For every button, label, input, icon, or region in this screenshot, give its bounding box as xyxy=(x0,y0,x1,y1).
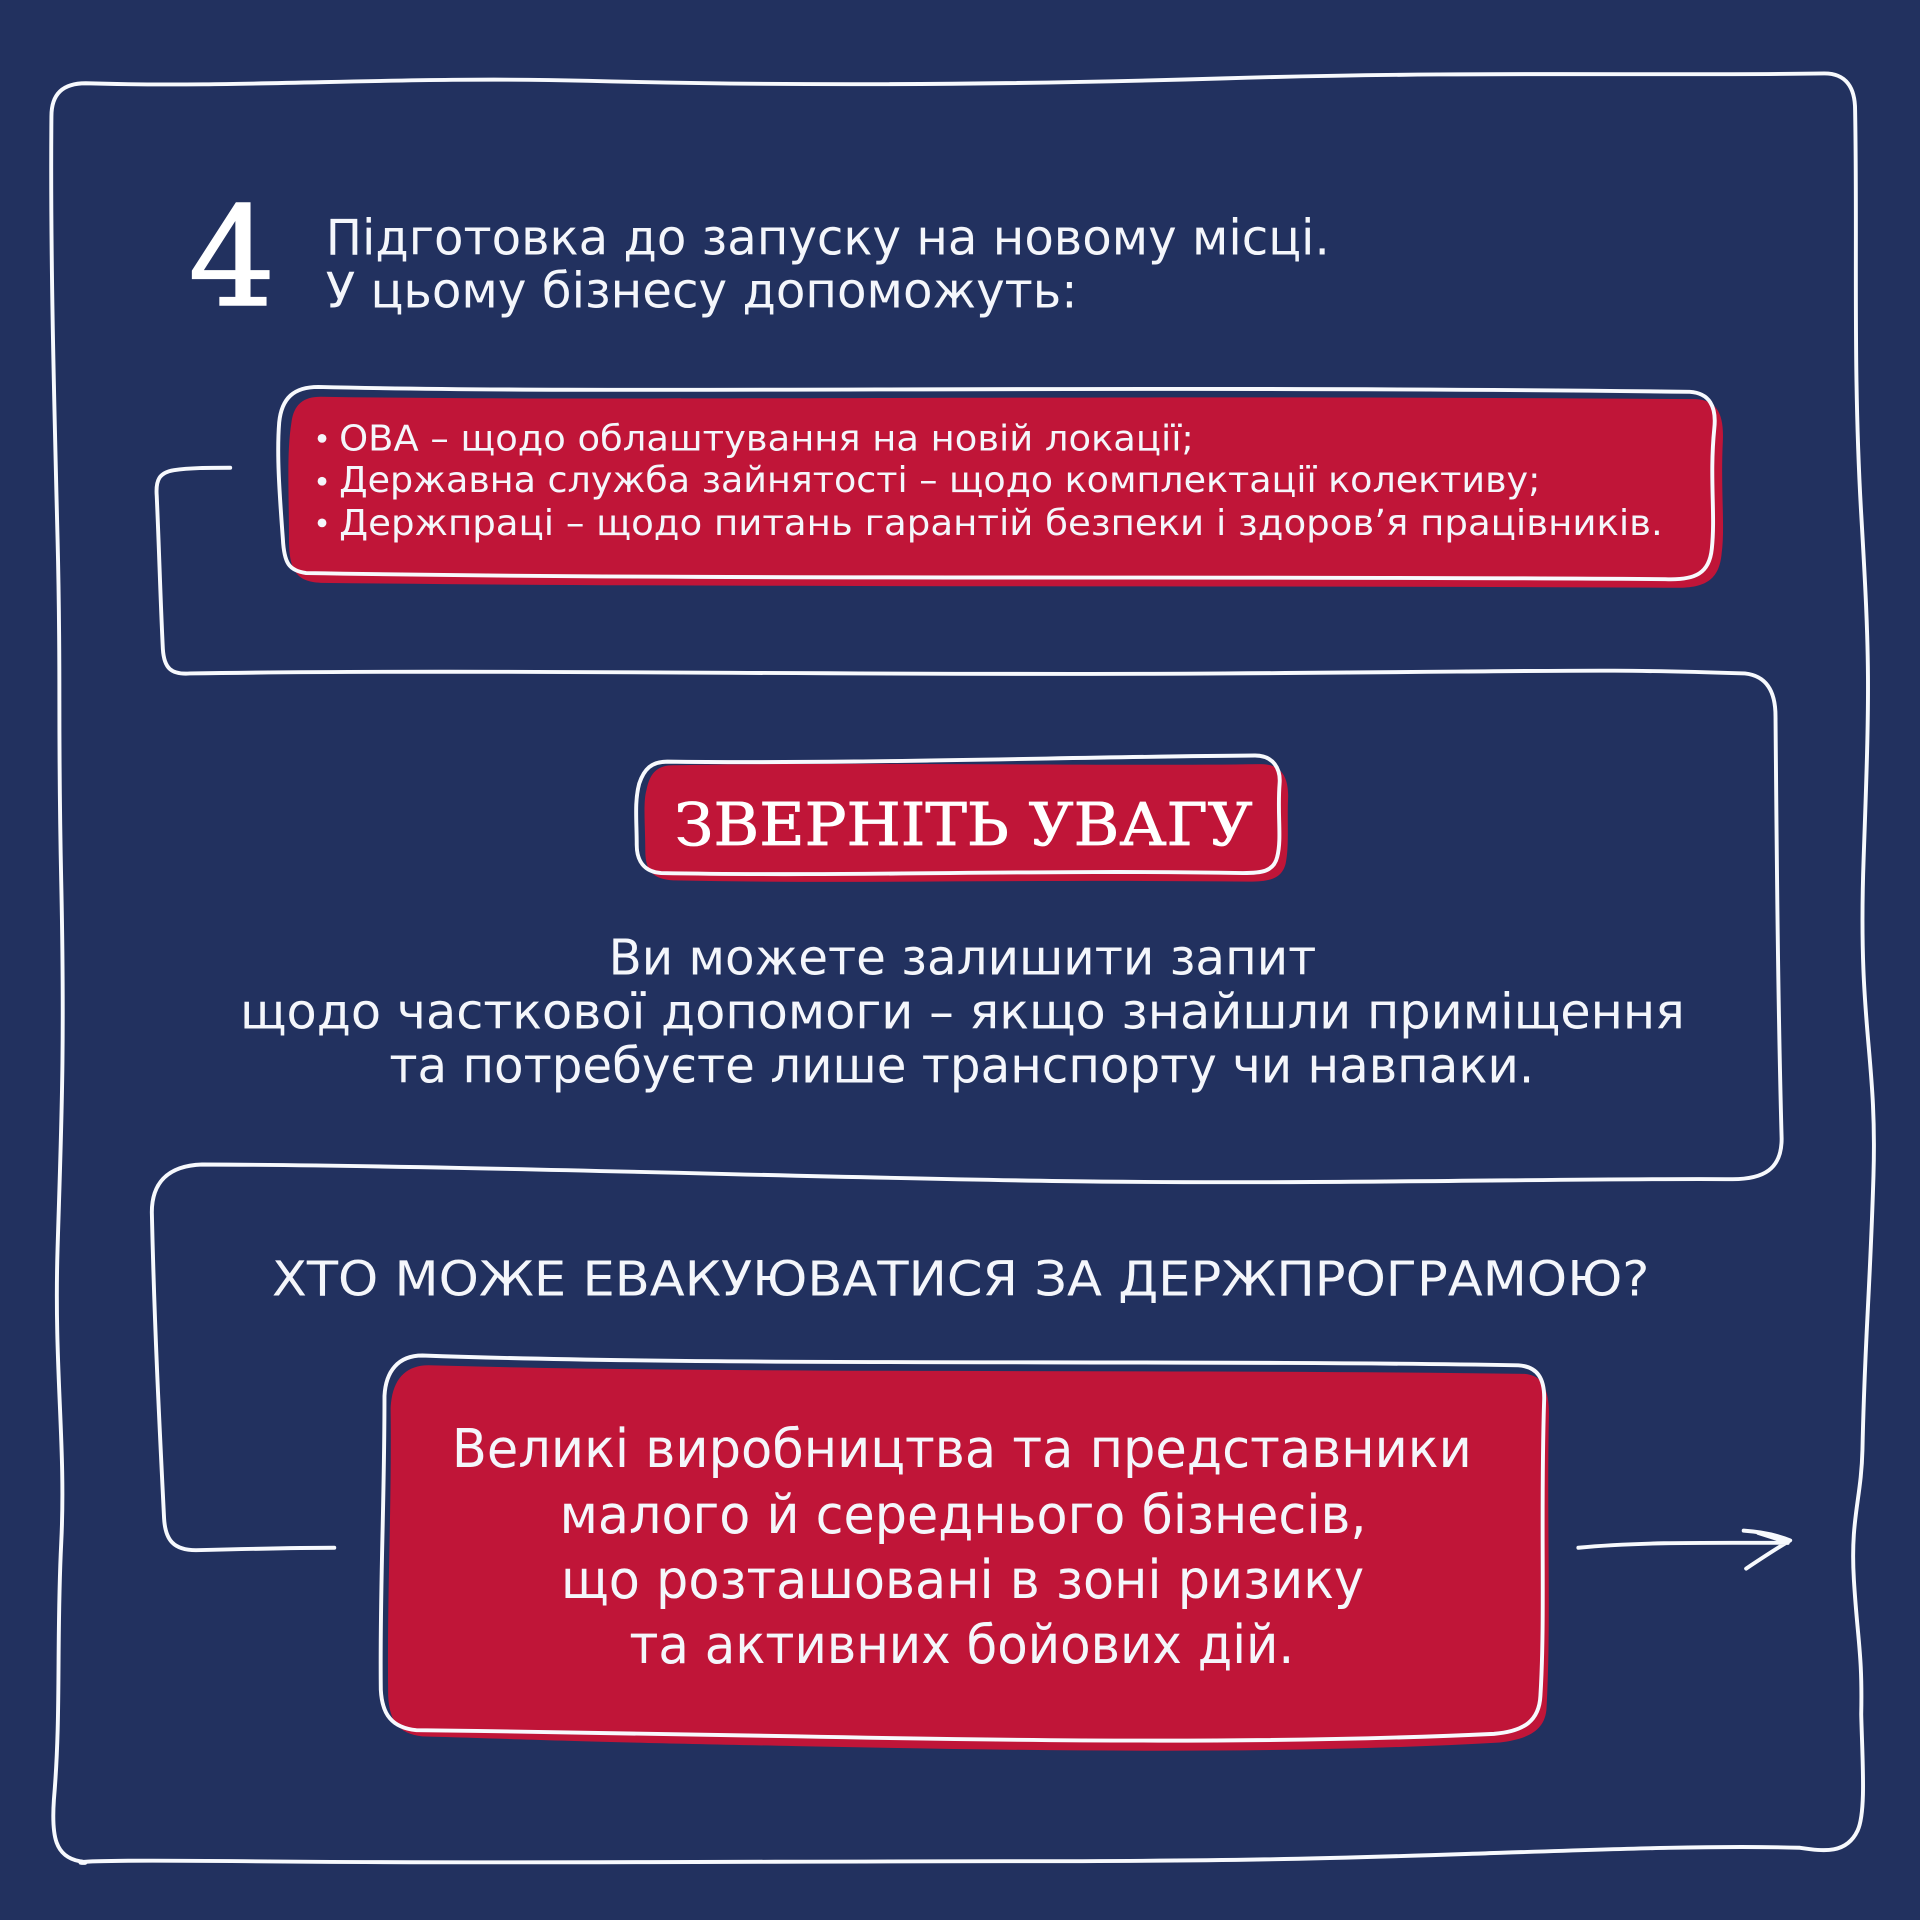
note text: щодо часткової допомоги – якщо знайшли приміщення xyxy=(240,984,1685,1041)
panel: helpers list xyxy=(278,387,1723,588)
heading: У цьому бізнесу допоможуть: xyxy=(326,262,1078,319)
note text xyxy=(240,930,1685,1094)
icon: step number: 4 xyxy=(189,179,276,338)
note text: та потребуєте лише транспорту чи навпаки. xyxy=(389,1037,1534,1094)
answer text: малого й середнього бізнесів, xyxy=(560,1483,1367,1546)
note text: Ви можете залишити запит xyxy=(609,930,1316,987)
list text xyxy=(318,419,1663,544)
answer text xyxy=(452,1417,1472,1676)
panel: answer xyxy=(381,1356,1549,1751)
answer text: та активних бойових дій. xyxy=(629,1613,1294,1676)
panel: attention badge xyxy=(636,756,1288,882)
question heading: ХТО МОЖЕ ЕВАКУЮВАТИСЯ ЗА ДЕРЖПРОГРАМОЮ? xyxy=(272,1253,1649,1308)
list text: Державна служба зайнятості – щодо комплектації колективу; xyxy=(339,460,1540,501)
badge heading: ЗВЕРНІТЬ УВАГУ xyxy=(675,790,1253,859)
list text: Держпраці – щодо питань гарантій безпеки і здоров’я працівників. xyxy=(339,503,1663,544)
heading xyxy=(326,210,1330,319)
connector: winding line xyxy=(152,468,1782,1550)
list text: ОВА – щодо облаштування на новій локації; xyxy=(339,419,1194,460)
heading: Підготовка до запуску на новому місці. xyxy=(326,210,1330,267)
answer text: Великі виробництва та представники xyxy=(452,1417,1472,1480)
arrow xyxy=(1578,1531,1790,1569)
answer text: що розташовані в зоні ризику xyxy=(561,1548,1364,1611)
